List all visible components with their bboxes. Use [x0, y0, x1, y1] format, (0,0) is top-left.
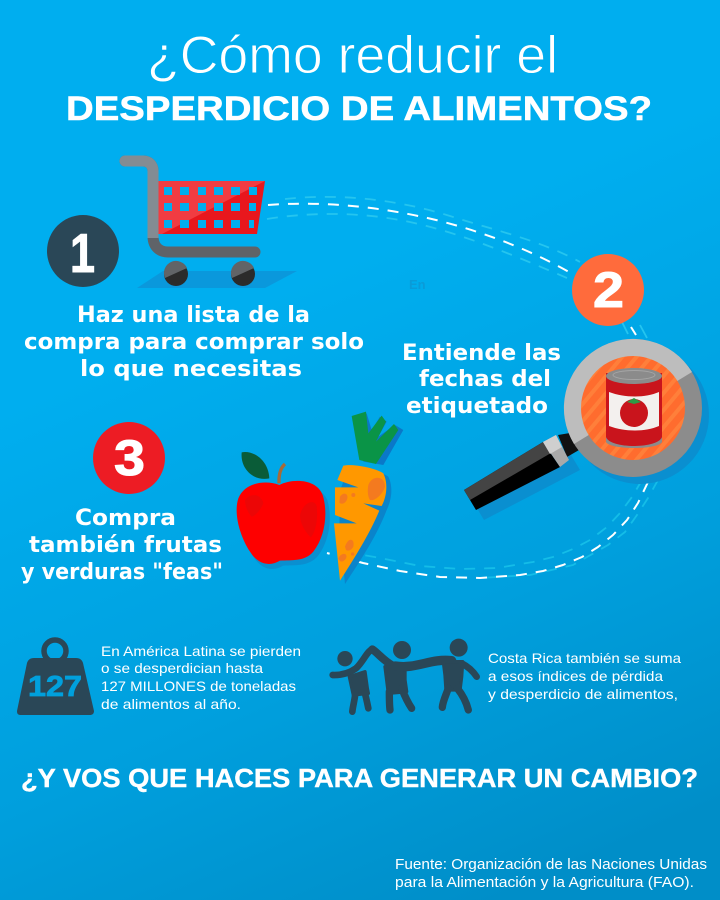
badge: step 3	[93, 422, 165, 494]
text: América Latina: de alimentos al año.	[101, 696, 241, 712]
badge: step 3: 3	[114, 430, 145, 486]
title: ¿Cómo reducir el	[147, 26, 558, 85]
step 2 text: Entiende las	[402, 341, 561, 366]
source note	[395, 857, 707, 891]
title	[66, 26, 652, 128]
icon: 127 weight	[17, 640, 94, 715]
faint stray text: En	[409, 277, 426, 292]
text: Costa Rica: y desperdicio de alimentos,	[488, 686, 678, 702]
step 2 text: fechas del	[419, 367, 551, 392]
icon: apple and carrot	[237, 412, 403, 584]
step 3 text	[21, 506, 223, 585]
step 1 text: lo que necesitas	[80, 357, 302, 382]
source note: para la Alimentación y la Agricultura (FAO).	[395, 875, 694, 891]
dashed path: cart to step 2	[267, 197, 580, 278]
title: DESPERDICIO DE ALIMENTOS?	[66, 90, 652, 128]
text: Costa Rica: a esos índices de pérdida	[488, 668, 663, 684]
icon: people group	[333, 639, 477, 712]
step 3 text: Compra	[75, 506, 176, 531]
step 1 text: compra para comprar solo	[24, 330, 364, 355]
step 2 text	[402, 341, 561, 419]
badge: step 1	[47, 215, 119, 287]
text: América Latina	[101, 643, 301, 712]
icon: magnifying glass with tomato can	[464, 339, 709, 520]
text: Costa Rica: Costa Rica también se suma	[488, 650, 681, 666]
text: América Latina: En América Latina se pierden	[101, 643, 301, 659]
dashed path: step 2 to magnifier	[622, 322, 647, 338]
call to action heading: ¿Y VOS QUE HACES PARA GENERAR UN CAMBIO?	[21, 763, 698, 793]
badge: step 2: 2	[593, 262, 624, 318]
icon: tomato can	[606, 368, 662, 448]
badge: step 2	[572, 254, 644, 326]
icon: shopping cart	[120, 156, 297, 288]
text: América Latina: 127 MILLONES de toneladas	[101, 678, 296, 694]
step 3 text: y verduras "feas"	[21, 560, 223, 585]
source note: Fuente: Organización de las Naciones Unidas	[395, 857, 707, 873]
text: Costa Rica	[488, 650, 681, 702]
step 3 text: también frutas	[29, 533, 222, 558]
dashed path: magnifier to carrot	[327, 480, 658, 578]
step 1 text	[24, 303, 364, 382]
step 2 text: etiquetado	[406, 394, 548, 419]
badge: step 1: 1	[70, 222, 95, 284]
icon: 127 weight: 127	[28, 671, 82, 703]
text: América Latina: o se desperdician hasta	[101, 660, 263, 676]
step 1 text: Haz una lista de la	[77, 303, 310, 328]
